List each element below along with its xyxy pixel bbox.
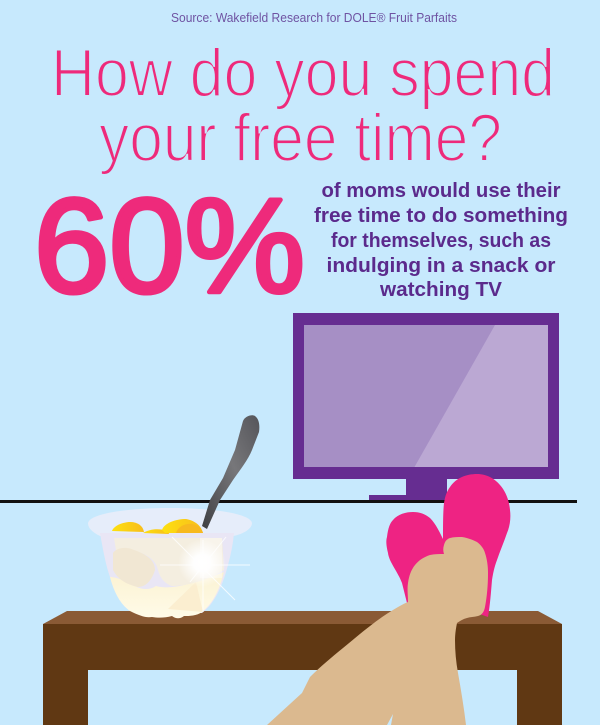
sparkle bbox=[160, 537, 250, 612]
title: your free time? bbox=[99, 100, 502, 176]
statistic description: of moms would use their bbox=[322, 180, 561, 202]
slippers bbox=[386, 474, 510, 617]
statistic description: watching TV bbox=[379, 279, 503, 301]
slipper: front bbox=[440, 474, 510, 617]
legs and feet bbox=[267, 537, 488, 725]
source line: Source: Wakefield Research for DOLE® Fruit Parfaits bbox=[171, 10, 457, 25]
statistic description: indulging in a snack or bbox=[326, 255, 556, 277]
cup body bbox=[100, 533, 234, 613]
parfait cup with spoon bbox=[88, 415, 259, 618]
spoon bbox=[202, 415, 259, 529]
table bbox=[43, 611, 562, 725]
title bbox=[51, 35, 555, 176]
cup rim bbox=[88, 508, 252, 536]
statistic description bbox=[314, 180, 568, 301]
yogurt bbox=[110, 572, 224, 618]
title: How do you spend bbox=[51, 35, 555, 111]
statistic description: for themselves, such as bbox=[331, 230, 551, 252]
yogurt shading bbox=[168, 582, 203, 612]
statistic description: free time to do something bbox=[314, 205, 568, 227]
shelf line bbox=[0, 500, 577, 503]
slipper: back bbox=[386, 512, 446, 603]
big statistic: 60%: 60% bbox=[34, 172, 305, 321]
banana pieces bbox=[113, 538, 224, 587]
television bbox=[293, 313, 559, 501]
peach slices bbox=[112, 519, 203, 534]
